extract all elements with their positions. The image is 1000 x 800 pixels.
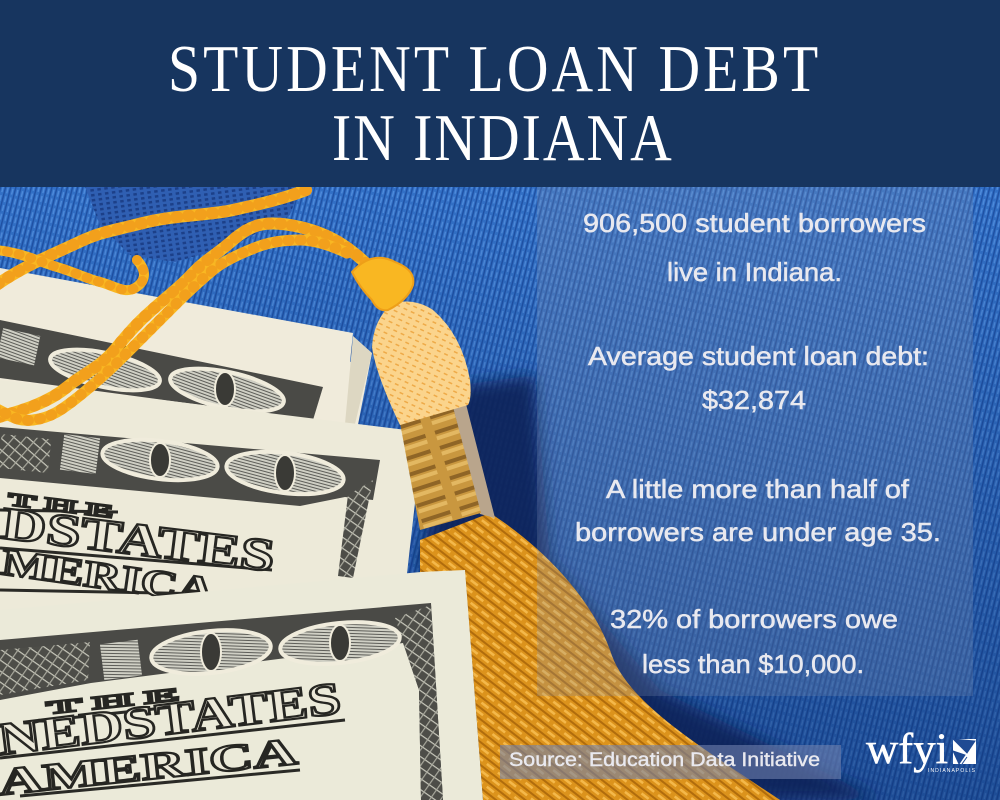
- bill: middle: DSTATES: [0, 497, 278, 581]
- logo: wfyi: INDIANAPOLIS: [928, 768, 976, 774]
- source label: [500, 745, 841, 779]
- stat: average debt: Average student loan debt:: [588, 341, 929, 371]
- stat: under 10k: less than $10,000.: [642, 649, 864, 679]
- bill: middle: MERICA: [0, 541, 218, 613]
- title: IN INDIANA: [332, 100, 672, 175]
- title: STUDENT LOAN DEBT: [168, 31, 818, 106]
- stat: average debt: [588, 341, 929, 415]
- bill: front: T H E: [46, 684, 180, 718]
- bill: middle: T H E: [8, 489, 114, 522]
- panel: statistics: [537, 187, 973, 696]
- cord knot: [352, 258, 413, 310]
- tassel strands: [420, 513, 780, 800]
- logo square: [953, 739, 976, 764]
- stat: borrowers: [583, 208, 926, 287]
- bill: middle: [0, 380, 423, 620]
- stat: age: A little more than half of: [606, 474, 910, 504]
- source label: Source: Education Data Initiative: [509, 750, 820, 771]
- stat: age: [575, 474, 941, 547]
- stat: borrowers: 906,500 student borrowers: [583, 208, 926, 238]
- stat: average debt: $32,874: [702, 385, 806, 415]
- stat: under 10k: 32% of borrowers owe: [610, 604, 898, 634]
- logo: wfyi: wfyi: [866, 726, 948, 773]
- stat: age: borrowers are under age 35.: [575, 517, 941, 547]
- title: [168, 31, 818, 175]
- bill: front: NEDSTATES: [0, 672, 344, 765]
- tassel ferrule: [453, 404, 495, 518]
- stat: under 10k: [610, 604, 898, 679]
- tassel head: [372, 302, 471, 425]
- tassel: [372, 302, 780, 800]
- gold cords: [0, 190, 413, 420]
- background: blue woven fabric: [0, 187, 1000, 800]
- bill: front: [0, 568, 483, 800]
- dollar bills: [0, 268, 483, 800]
- stat: borrowers: live in Indiana.: [667, 257, 842, 287]
- bill: back: [0, 268, 372, 440]
- header band: [0, 0, 1000, 187]
